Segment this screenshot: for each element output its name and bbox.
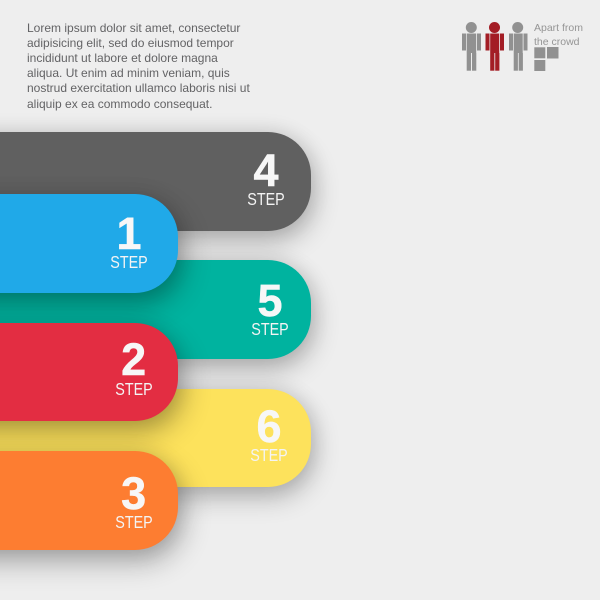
label: step 6: STEP <box>250 445 288 465</box>
logo text <box>534 22 583 48</box>
logo icon: three people <box>462 22 528 71</box>
label: step 5: 5 <box>257 275 283 326</box>
label: step 1: STEP <box>110 252 148 272</box>
bar: step 3 <box>0 451 178 550</box>
label: step 4: 4 <box>253 145 279 196</box>
label: step 2: 2 <box>121 334 146 385</box>
intro text block: aliquip ex ea commodo consequat. <box>27 97 212 111</box>
bar: step 2 <box>0 322 178 421</box>
icon: grey person left <box>462 22 481 71</box>
bar: step 1 <box>0 194 178 293</box>
logo text: the crowd <box>534 36 580 48</box>
intro text block: adipisicing elit, sed do eiusmod tempor <box>27 36 234 50</box>
logo squares <box>534 47 558 71</box>
bar: step 6 <box>0 389 311 487</box>
label: step 3: STEP <box>115 512 152 532</box>
label: step 6: 6 <box>256 401 282 452</box>
intro text block: aliqua. Ut enim ad minim veniam, quis <box>27 66 230 80</box>
label: step 6 <box>250 401 288 465</box>
label: step 2: STEP <box>115 379 152 399</box>
label: step 4: STEP <box>247 189 285 209</box>
label: step 4 <box>247 145 285 209</box>
label: step 2 <box>115 334 152 399</box>
label: step 5 <box>251 275 289 339</box>
intro text block: incididunt ut labore et dolore magna <box>27 51 218 65</box>
intro text block <box>27 20 250 111</box>
label: step 3: 3 <box>121 468 146 519</box>
icon: red person centre <box>486 22 504 71</box>
intro text block: Lorem ipsum dolor sit amet, consectetur <box>27 20 240 34</box>
label: step 1: 1 <box>116 208 142 259</box>
intro text block: nostrud exercitation ullamco laboris nisi ut <box>27 81 250 95</box>
label: step 5: STEP <box>251 319 289 339</box>
icon: grey person right <box>509 22 528 71</box>
label: step 3 <box>115 468 152 532</box>
bar: step 4 <box>0 132 311 230</box>
label: step 1 <box>110 208 148 272</box>
logo text: Apart from <box>534 22 583 34</box>
bar: step 5 <box>0 260 311 359</box>
